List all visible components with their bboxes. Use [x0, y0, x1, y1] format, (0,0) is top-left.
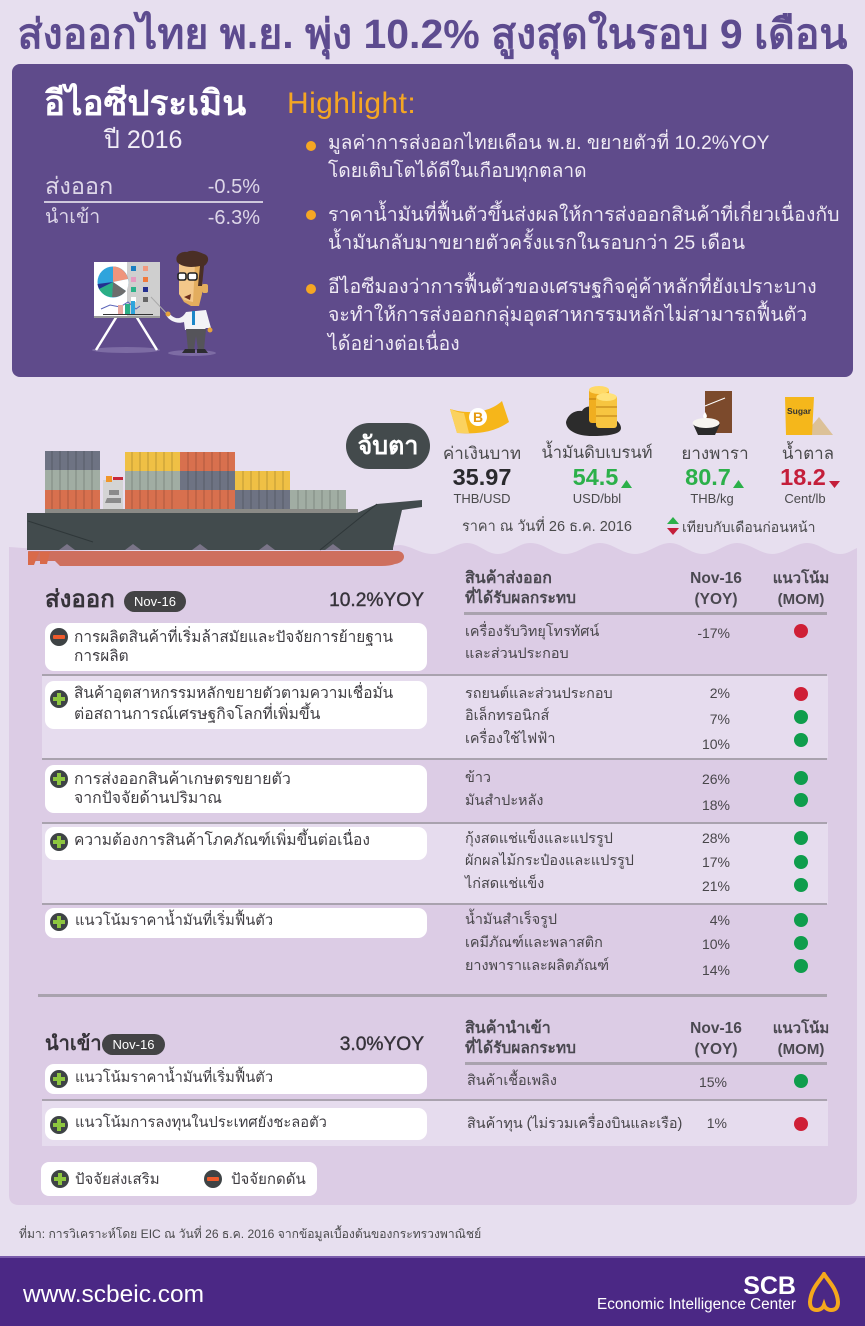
heading: year 2016: ปี 2016: [104, 126, 182, 154]
table rows: oil related: 14%: [702, 962, 730, 978]
table rows: consumer goods: กุ้งสดแช่แข็งและแปรรูป: [465, 831, 613, 847]
indicator: baht: ค่าเงินบาท: [443, 444, 521, 463]
table row: radio TV: [465, 621, 808, 662]
forecast: imports: -6.3%: [208, 207, 260, 229]
highlight item 1: มูลค่าการส่งออกไทยเดือน พ.ย. ขยายตัวที่ 10.2%YOY: [328, 133, 769, 154]
table rows: consumer goods: [464, 829, 808, 894]
indicator: rubber: THB/kg: [690, 491, 734, 506]
factor: export minus 1: การผลิตสินค้าที่เริ่มล้าสมัยและปัจจัยการย้ายฐาน: [74, 629, 393, 646]
icon: baht banknote: [450, 401, 509, 434]
table rows: oil related: 4%: [710, 912, 730, 928]
factor: export plus 3: ความต้องการสินค้าโภคภัณฑ์เพิ่มขึ้นต่อเนื่อง: [74, 832, 370, 849]
panel: EIC forecast and highlights: [12, 64, 853, 377]
table rows: agriculture: 18%: [702, 797, 730, 813]
table rows: industrial goods: 10%: [702, 736, 730, 752]
heading: imports section: Nov-16: [113, 1037, 154, 1052]
table row: radio TV: -17%: [697, 625, 730, 641]
forecast: imports: นำเข้า: [45, 206, 100, 228]
callout: watch label: จับตา: [358, 432, 418, 460]
table rows: oil related: 10%: [702, 936, 730, 952]
table header: exports: แนวโน้ม: [773, 570, 829, 587]
panel: lower background with waves: [9, 543, 857, 1205]
factor: export plus 2: [45, 765, 427, 813]
legend: factor types: ปัจจัยส่งเสริม: [75, 1171, 160, 1188]
factor: import plus 1: แนวโน้มราคาน้ำมันที่เริ่มฟื้นตัว: [75, 1070, 273, 1086]
icon: sugar bag: [785, 397, 833, 435]
heading: highlight: Highlight:: [287, 87, 416, 120]
table header: exports: ที่ได้รับผลกระทบ: [465, 590, 576, 607]
heading: exports section: Nov-16: [134, 594, 176, 609]
table rows: agriculture: มันสำปะหลัง: [465, 793, 543, 809]
table rows: industrial goods: 2%: [710, 685, 730, 701]
table rows: consumer goods: ไก่สดแช่แข็ง: [465, 876, 544, 892]
table header: imports: ที่ได้รับผลกระทบ: [465, 1040, 576, 1057]
forecast: exports: -0.5%: [208, 176, 260, 198]
table rows: oil related: ยางพาราและผลิตภัณฑ์: [465, 958, 609, 974]
title: ส่งออกไทย พ.ย. พุ่ง 10.2% สูงสุดในรอบ 9 เดือน: [18, 11, 847, 57]
indicator: rubber: [681, 444, 749, 506]
highlight item 1: [306, 129, 769, 182]
icon: plus: [51, 1170, 69, 1188]
highlight item 3: อีไอซีมองว่าการฟื้นตัวของเศรษฐกิจคู่ค้าหลักที่ยังเปราะบาง: [328, 276, 817, 298]
icon: SCB logo: [808, 1272, 840, 1312]
note: price date: ราคา ณ วันที่ 26 ธ.ค. 2016: [462, 519, 632, 535]
heading: exports section: ส่งออก: [45, 586, 115, 613]
factor: export plus 2: จากปัจจัยด้านปริมาณ: [74, 790, 222, 807]
table header: imports: (MOM): [778, 1041, 824, 1058]
table row: radio TV: เครื่องรับวิทยุโทรทัศน์: [465, 624, 599, 640]
table rows: oil related: [465, 908, 808, 978]
factor: import plus 2: แนวโน้มการลงทุนในประเทศยังชะลอตัว: [75, 1115, 327, 1131]
icon: plus: [50, 833, 68, 851]
heading: imports section: นำเข้า: [45, 1033, 102, 1055]
highlight item 2: น้ำมันกลับมาขยายตัวครั้งแรกในรอบกว่า 25 เดือน: [328, 232, 745, 254]
icon: minus: [204, 1170, 222, 1188]
alternating row bands: [42, 676, 828, 1146]
forecast: exports: [45, 173, 260, 199]
indicator: sugar: 18.2: [780, 464, 826, 490]
table rows: agriculture: 26%: [702, 771, 730, 787]
factor: export plus 1: ต่อสถานการณ์เศรษฐกิจโลกที่เพิ่มขึ้น: [74, 706, 320, 723]
factor: import plus 2: [45, 1108, 427, 1140]
highlight item 3: จะทำให้การส่งออกกลุ่มอุตสาหกรรมหลักไม่สามารถฟื้นตัว: [328, 304, 807, 326]
factor: export plus 1: [45, 681, 427, 729]
table rows: industrial goods: เครื่องใช้ไฟฟ้า: [465, 731, 555, 747]
table row: fuel: [467, 1070, 808, 1090]
indicator: rubber: ยางพารา: [681, 444, 749, 463]
factor: export plus 1: สินค้าอุตสาหกรรมหลักขยายตัวตามความเชื่อมั่น: [74, 685, 393, 702]
factor: import plus 1: [45, 1064, 427, 1094]
icon: oil barrels: [566, 386, 621, 436]
table header: imports: Nov-16: [690, 1020, 742, 1037]
table header: exports: Nov-16: [690, 570, 742, 587]
table row: fuel: 15%: [699, 1074, 727, 1090]
legend: factor types: [41, 1162, 317, 1196]
icon: plus: [50, 770, 68, 788]
heading: imports section: [45, 1032, 424, 1055]
indicator: baht: 35.97: [453, 464, 511, 490]
table rows: consumer goods: 17%: [702, 854, 730, 870]
indicator: Brent crude: [541, 440, 653, 506]
icon: plus: [50, 690, 68, 708]
indicator: sugar: น้ำตาล: [782, 444, 834, 463]
table rows: industrial goods: 7%: [710, 711, 730, 727]
source note: ที่มา: การวิเคราะห์โดย EIC ณ วันที่ 26 ธ.ค. 2016 จากข้อมูลเบื้องต้นของกระทรวงพาณิชย์: [19, 1227, 481, 1241]
center name: Economic Intelligence Center: [597, 1296, 796, 1313]
footer bar: [0, 1256, 865, 1326]
icon: plus: [50, 913, 68, 931]
factor: export plus 4: แนวโน้มราคาน้ำมันที่เริ่มฟื้นตัว: [75, 913, 273, 929]
table rows: industrial goods: [465, 685, 808, 752]
legend: compared to previous month: เทียบกับเดือนก่อนหน้า: [682, 519, 815, 535]
highlight item 1: โดยเติบโตได้ดีในเกือบทุกตลาด: [328, 161, 587, 182]
icon: minus: [50, 628, 68, 646]
table row: radio TV: และส่วนประกอบ: [465, 646, 569, 662]
forecast: exports: ส่งออก: [45, 173, 113, 199]
SCB name: SCB: [743, 1272, 796, 1300]
factor: export plus 3: [45, 827, 427, 860]
table header: exports: [465, 568, 829, 608]
indicator: sugar: Cent/lb: [784, 491, 826, 506]
indicator: Brent crude: USD/bbl: [573, 491, 621, 506]
table rows: consumer goods: 28%: [702, 830, 730, 846]
table rows: oil related: เคมีภัณฑ์และพลาสติก: [465, 935, 603, 951]
table rows: consumer goods: 21%: [702, 878, 730, 894]
indicator: rubber: 80.7: [685, 464, 731, 490]
indicator: sugar: [780, 441, 840, 506]
table rows: agriculture: ข้าว: [465, 770, 491, 786]
table row: fuel: สินค้าเชื้อเพลิง: [467, 1073, 557, 1089]
icon: plus: [50, 1116, 68, 1134]
highlight item 2: ราคาน้ำมันที่ฟื้นตัวขึ้นส่งผลให้การส่งออกสินค้าที่เกี่ยวเนื่องกับ: [328, 204, 840, 226]
table header: imports: (YOY): [694, 1041, 738, 1058]
legend: factor types: ปัจจัยกดดัน: [231, 1171, 306, 1188]
highlight item 2: [306, 200, 840, 254]
indicator: Brent crude: น้ำมันดิบเบรนท์: [541, 444, 653, 462]
table row: capital goods: 1%: [707, 1115, 727, 1131]
table header: imports: สินค้านำเข้า: [465, 1020, 551, 1037]
table header: exports: (MOM): [778, 591, 824, 608]
indicator: baht: THB/USD: [453, 491, 511, 506]
table rows: oil related: น้ำมันสำเร็จรูป: [465, 912, 557, 928]
indicator: baht: [443, 444, 521, 506]
icon: plus: [50, 1070, 68, 1088]
factor: export minus 1: [45, 623, 427, 671]
heading: imports section: 3.0%YOY: [340, 1034, 424, 1055]
factor: export plus 2: การส่งออกสินค้าเกษตรขยายตัว: [74, 771, 291, 788]
table header: exports: สินค้าส่งออก: [465, 570, 552, 587]
table header: imports: [465, 1018, 829, 1058]
icon: presenter with chart board: [92, 250, 216, 356]
highlight item 3: [306, 272, 817, 355]
forecast: imports: [45, 206, 260, 229]
website url: www.scbeic.com: [23, 1281, 204, 1308]
table rows: agriculture: [465, 770, 808, 813]
icon: sugar bag: Sugar: [787, 406, 812, 416]
table header: exports: (YOY): [694, 591, 738, 608]
table header: imports: แนวโน้ม: [773, 1020, 829, 1037]
table rows: industrial goods: รถยนต์และส่วนประกอบ: [465, 686, 613, 702]
icon: baht banknote: B: [473, 409, 483, 425]
table row: capital goods: [467, 1113, 808, 1132]
factor: export plus 4: [45, 908, 427, 938]
callout: watch label: [346, 423, 430, 469]
table rows: industrial goods: อิเล็กทรอนิกส์: [465, 708, 549, 724]
heading: exports section: [45, 586, 424, 613]
heading: EIC forecast: อีไอซีประเมิน: [44, 84, 246, 123]
heading: exports section: 10.2%YOY: [329, 590, 424, 611]
indicator: Brent crude: 54.5: [573, 464, 618, 490]
icon: container ship: [27, 451, 422, 566]
factor: export minus 1: การผลิต: [74, 648, 129, 665]
table rows: consumer goods: ผักผลไม้กระป๋องและแปรรูป: [465, 853, 634, 869]
table row: capital goods: สินค้าทุน (ไม่รวมเครื่องบินและเรือ): [467, 1116, 682, 1132]
icon: rubber tapping: [692, 391, 732, 435]
highlight item 3: ได้อย่างต่อเนื่อง: [328, 333, 460, 355]
